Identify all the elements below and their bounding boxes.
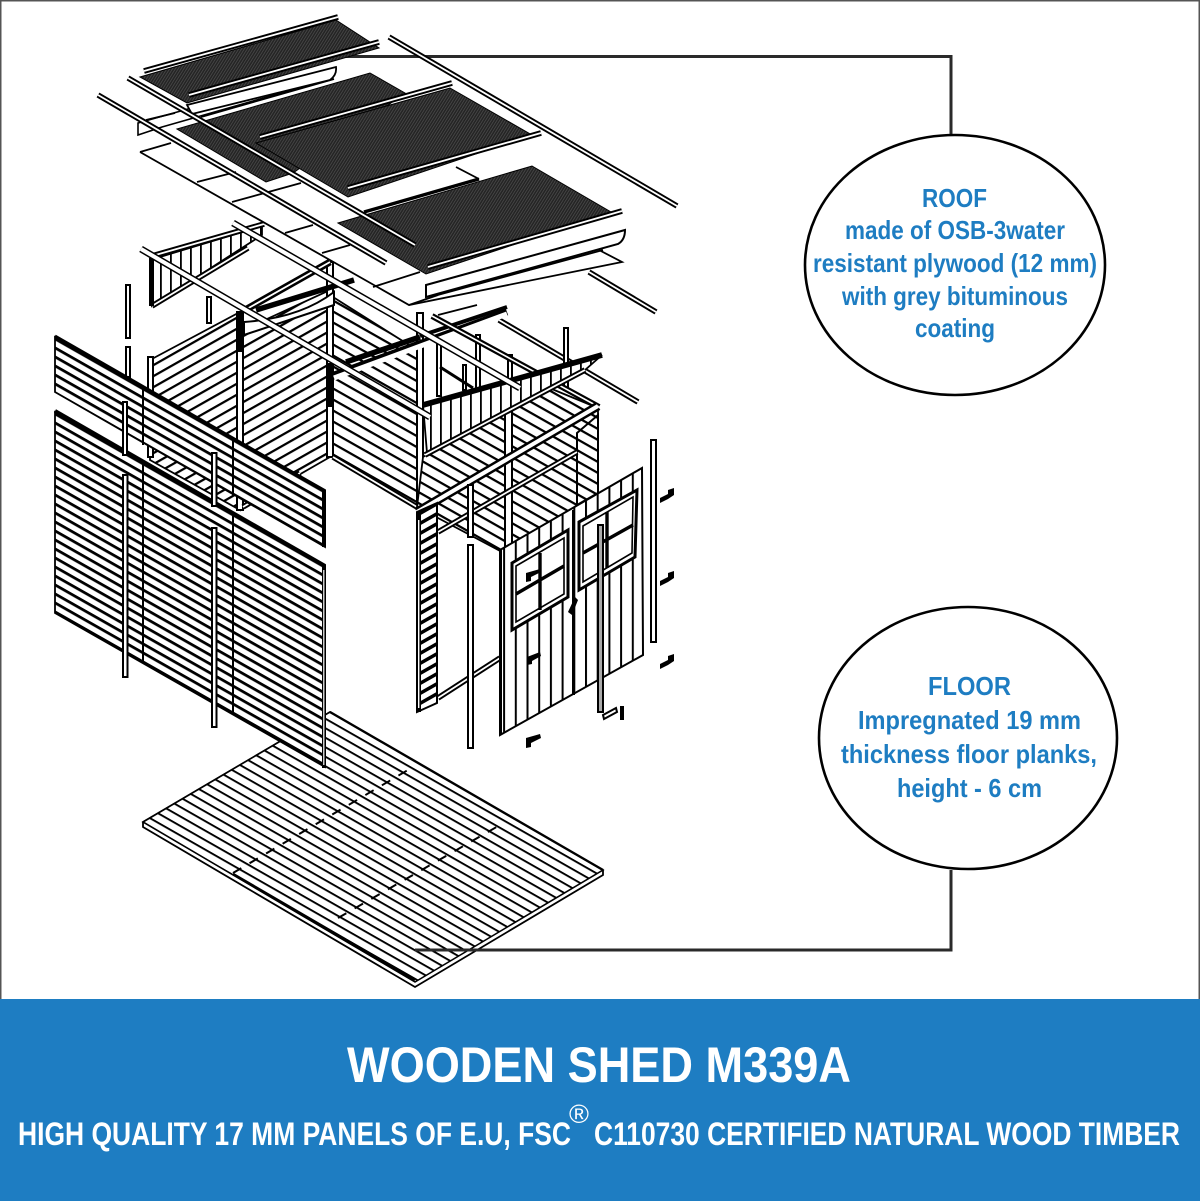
roof callout text: resistant plywood (12 mm)	[813, 248, 1097, 278]
front gable	[423, 355, 602, 455]
floor callout text: thickness floor planks,	[841, 739, 1097, 769]
long beam rear	[233, 223, 520, 388]
roof callout text: ROOF	[922, 183, 987, 213]
front sheet edge	[434, 250, 603, 296]
floor callout text: FLOOR	[928, 671, 1011, 701]
window: left door	[512, 530, 568, 630]
roofing panel: front	[338, 166, 611, 274]
connector line: floor callout	[415, 870, 951, 950]
centre post	[505, 403, 512, 547]
floor callout text: Impregnated 19 mm	[858, 705, 1081, 735]
wall posts	[126, 262, 568, 510]
callout: floor	[819, 607, 1117, 869]
front lower rail	[438, 658, 500, 698]
loose post right of door	[651, 440, 656, 642]
roofing panel: centre-left	[177, 73, 405, 182]
floor callout text	[841, 671, 1097, 803]
rail: centre panel bottom	[348, 133, 541, 188]
front fascia board	[426, 230, 625, 297]
subtitle: ®	[569, 1099, 589, 1129]
right inner wall	[333, 297, 417, 507]
rail: rear panel bottom	[189, 42, 379, 95]
double door	[499, 468, 643, 735]
trim under rear panel	[187, 67, 336, 114]
roof boarding sheet	[140, 120, 622, 315]
subtitle: HIGH QUALITY 17 MM PANELS OF E.U, FSC	[18, 1116, 571, 1152]
floor callout text: height - 6 cm	[897, 773, 1042, 803]
rail: rear panel top	[144, 17, 338, 71]
right compartment floor	[417, 387, 598, 552]
cross beams	[244, 262, 507, 378]
front mid rail	[438, 452, 577, 532]
long roof rail centre	[128, 78, 415, 245]
callout: roof	[805, 135, 1105, 395]
boarding strip near front panel	[364, 179, 479, 212]
left wall loose posts	[123, 402, 216, 727]
long beam front	[141, 249, 430, 417]
title banner	[0, 999, 1200, 1201]
rear right top rails	[432, 316, 599, 407]
window: right door	[579, 490, 637, 590]
connector line: roof callout	[330, 56, 951, 136]
long roof rail right	[389, 37, 677, 206]
roof assembly	[98, 17, 677, 417]
upper left wall panel	[55, 336, 326, 547]
rear left wall	[150, 312, 240, 510]
roofing panel: centre-right	[256, 88, 532, 197]
lower left wall panel	[55, 411, 326, 768]
loose post in front of door	[598, 525, 603, 712]
rear rail	[499, 320, 638, 402]
title: WOODEN SHED M339A	[347, 1037, 851, 1093]
rail: centre panel top	[260, 83, 452, 137]
exploded shed drawing	[55, 17, 677, 987]
roof callout text: with grey bituminous	[841, 281, 1068, 311]
floor platform	[143, 712, 603, 987]
front short post	[468, 485, 473, 537]
right end panel	[577, 415, 598, 505]
roofing panel: rear	[140, 20, 379, 103]
rail below roof	[589, 272, 656, 312]
subtitle	[18, 1099, 1180, 1152]
front left panel	[416, 503, 437, 712]
loose post left of door	[468, 545, 473, 748]
rail: front panel	[428, 211, 622, 267]
rear fascia board	[138, 68, 334, 135]
roof callout text: coating	[915, 313, 995, 343]
door hardware	[526, 488, 674, 748]
roof callout text	[813, 183, 1097, 343]
roof callout text: made of OSB-3water	[845, 215, 1065, 245]
rear centre wall	[243, 290, 330, 507]
rear gable	[149, 224, 264, 306]
front top beam	[417, 406, 598, 512]
long roof rail left	[98, 95, 386, 263]
